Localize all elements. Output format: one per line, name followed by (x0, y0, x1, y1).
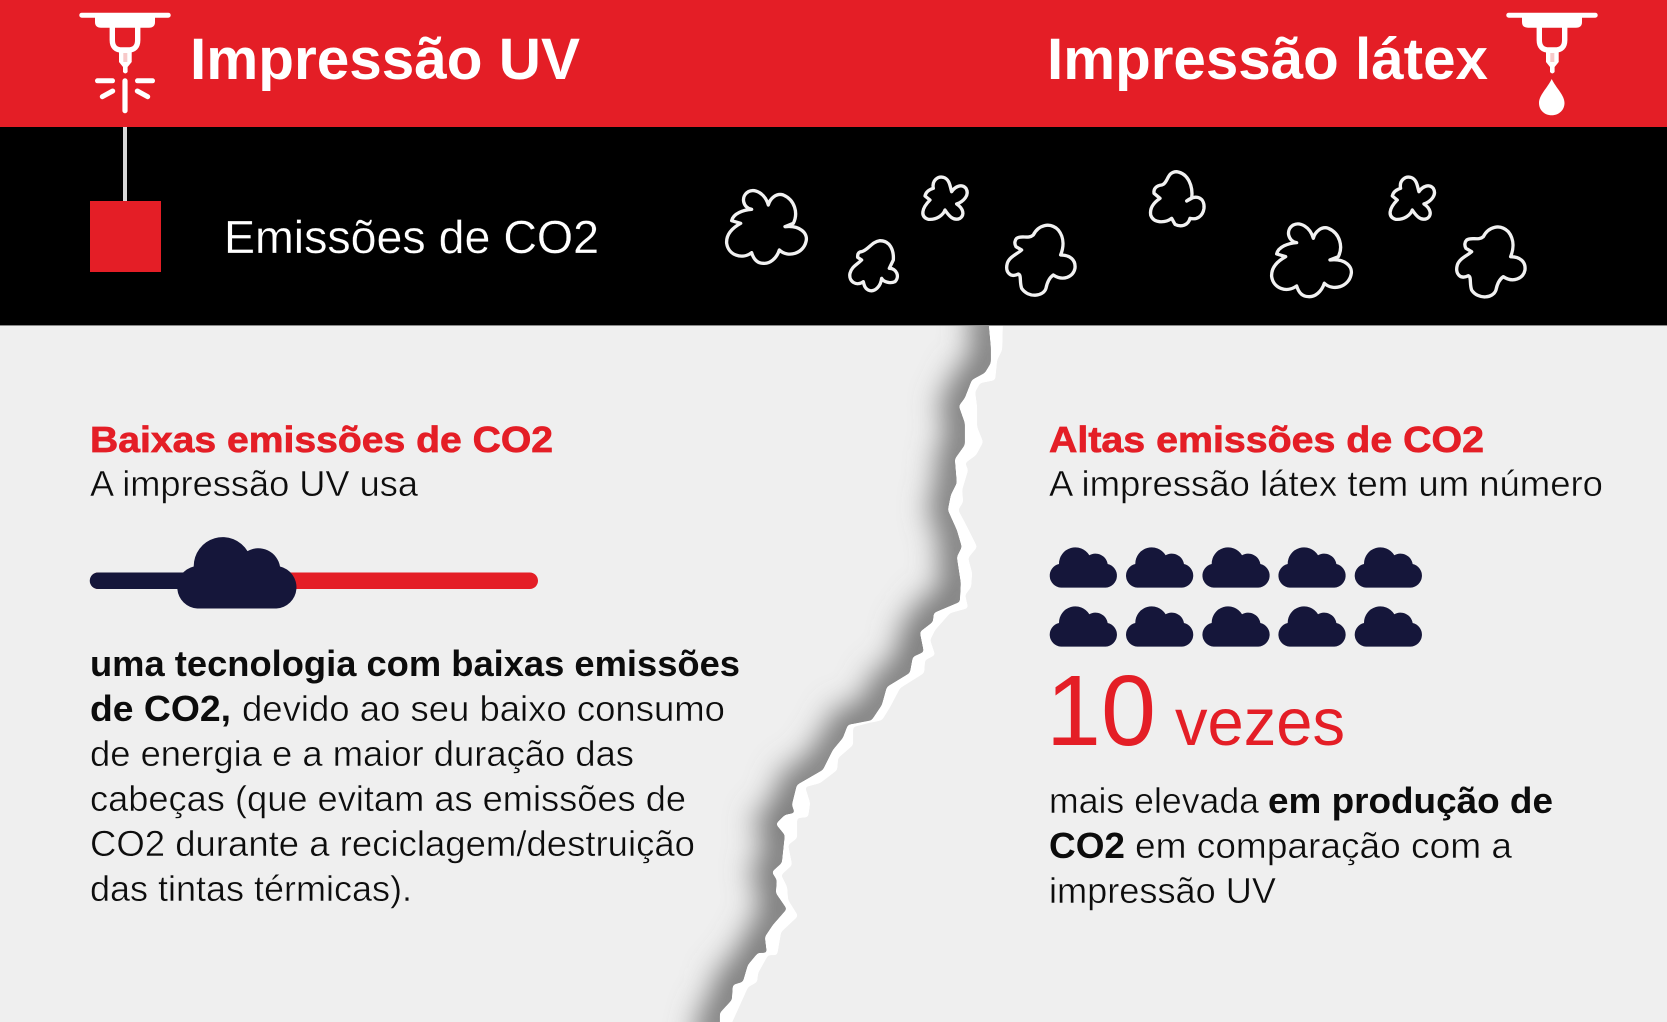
emissions band: black (0, 127, 1667, 326)
unit: vezes: vezes (1175, 685, 1345, 760)
heading: Impressão látex: Impressão látex (1047, 27, 1488, 92)
heading: Impressão UV: Impressão UV (190, 27, 580, 92)
body paragraph: em produção de (1268, 780, 1553, 821)
icon: outline cloud 1 (727, 191, 806, 263)
body paragraph: uma tecnologia com baixas emissões (90, 643, 740, 684)
body paragraph: devido ao seu baixo consumo (242, 688, 725, 729)
panel: latex printing, high emissions (1046, 419, 1603, 911)
emission clouds (outlined) (727, 172, 1525, 297)
icon: outline cloud 3 (923, 177, 967, 219)
slider graphic with cloud (90, 537, 538, 609)
intro: A impressão UV usa: A impressão UV usa (90, 463, 419, 504)
icon: outline cloud 6 (1272, 224, 1351, 297)
icon: outline cloud 4 (1150, 172, 1204, 226)
body paragraph: CO2 (1049, 825, 1125, 866)
body paragraph: de CO2, (90, 688, 231, 729)
header band: red (0, 0, 1667, 127)
body paragraph: impressão UV (1049, 870, 1276, 911)
label: Emissões de CO2: Emissões de CO2 (224, 211, 599, 263)
intro: A impressão látex tem um número: A impressão látex tem um número (1049, 463, 1603, 504)
torn paper divider (710, 300, 1003, 1022)
icon: outline cloud 5 (1007, 225, 1075, 295)
body paragraph (1049, 780, 1553, 911)
body paragraph (90, 643, 740, 909)
icon: latex print head with drop (1506, 13, 1598, 115)
body paragraph: das tintas térmicas). (90, 868, 412, 909)
icon: outline cloud 8 (1457, 227, 1525, 297)
body paragraph: mais elevada (1049, 780, 1260, 821)
icon grid: ten clouds (1050, 547, 1422, 647)
icon: UV print head with rays (79, 13, 171, 113)
big number: 10: 10 (1046, 655, 1156, 767)
icon: outline cloud 7 (1390, 177, 1434, 219)
heading: Altas emissões de CO2: Altas emissões de CO2 (1049, 419, 1484, 460)
body paragraph: de energia e a maior duração das (90, 733, 634, 774)
connector line (123, 127, 127, 201)
red square marker (90, 201, 161, 272)
panel: UV printing, low emissions (90, 419, 740, 909)
icon: outline cloud 2 (850, 241, 897, 291)
heading: Baixas emissões de CO2: Baixas emissões de CO2 (90, 419, 553, 460)
body paragraph: em comparação com a (1135, 825, 1513, 866)
body paragraph: cabeças (que evitam as emissões de (90, 778, 686, 819)
body paragraph: CO2 durante a reciclagem/destruição (90, 823, 695, 864)
